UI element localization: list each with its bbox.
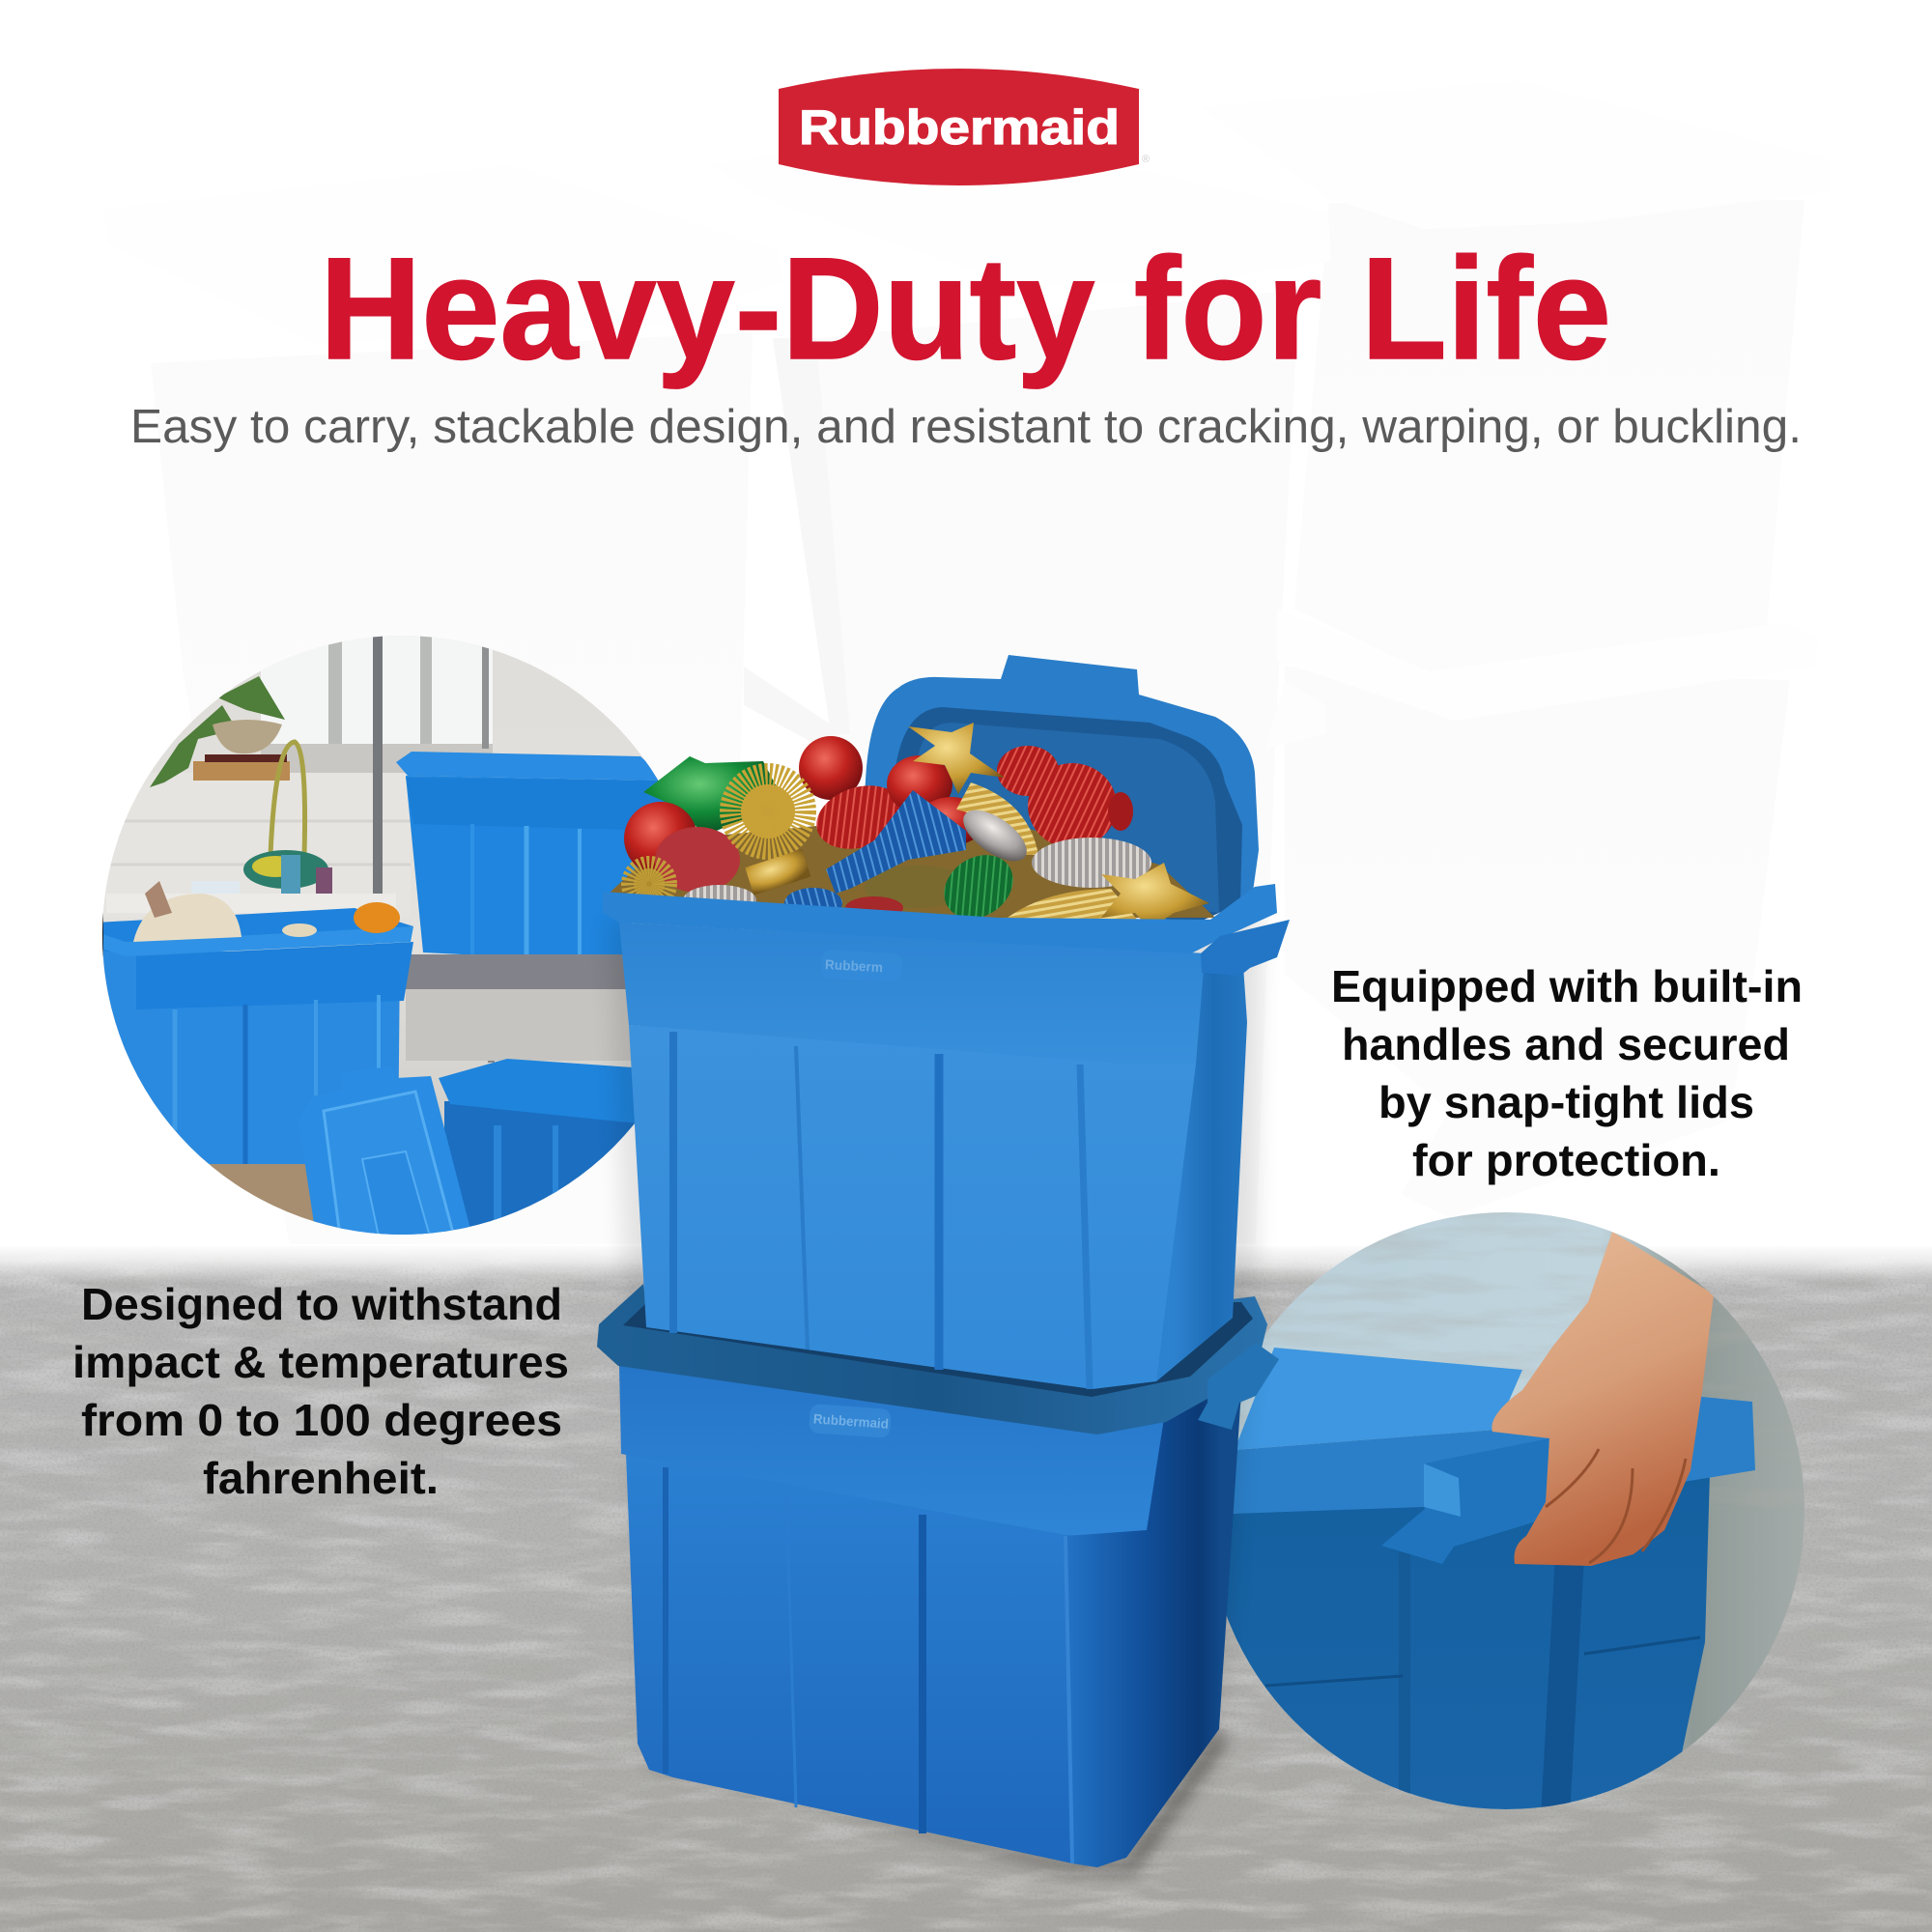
red ball, left xyxy=(624,802,697,875)
striped red ornament, centre xyxy=(809,775,911,860)
stone texture xyxy=(1240,1212,1607,1422)
gold tinsel, centre xyxy=(741,784,795,838)
gold star tail xyxy=(956,782,1038,855)
soft shadow of bin stack xyxy=(609,918,1261,1860)
subtitle: Easy to carry, stackable design, and resistant to cracking, warping, or buckling. xyxy=(130,401,1802,453)
red cluster behind star xyxy=(887,755,952,813)
top bin logo mark xyxy=(820,950,903,982)
bottom bin ribs xyxy=(666,1467,1072,1863)
silver ribbed ornament xyxy=(1032,838,1151,888)
blue tree ornament xyxy=(826,790,966,894)
bottom bin side xyxy=(1065,1362,1246,1867)
logo: Rubbermaid: Rubbermaid xyxy=(799,100,1120,155)
red ornament, low xyxy=(845,896,903,920)
white brick ledge xyxy=(110,773,411,866)
gold star tail, low xyxy=(1001,889,1140,923)
floor shadow under bins xyxy=(638,1729,1227,1874)
front blue bin xyxy=(97,908,413,1164)
top bin rim xyxy=(603,884,1277,953)
top bin upper band xyxy=(619,923,1208,1064)
callout: temperature text: fahrenheit. xyxy=(203,1453,439,1503)
bottom bin logo mark xyxy=(809,1404,892,1438)
bottom bin rim inner recess xyxy=(623,1302,1253,1397)
wire shelving poles xyxy=(373,628,495,1063)
panel: lifestyle photo circle, left xyxy=(102,636,667,1235)
callout: temperature text xyxy=(72,1279,569,1503)
gold shooting star xyxy=(908,723,1005,794)
silver ornament, low xyxy=(683,885,756,916)
lid inner panel xyxy=(869,707,1242,923)
gold box xyxy=(745,849,810,895)
logo: Rubbermaid xyxy=(779,69,1150,185)
background: ghosted white stacked bins xyxy=(104,81,1830,1246)
red tangled ornament xyxy=(655,827,740,893)
background: concrete floor xyxy=(0,1244,1932,1932)
lower right bin xyxy=(439,1059,647,1236)
callout: handles text: for protection. xyxy=(1412,1135,1720,1185)
bin lid top xyxy=(1235,1348,1522,1450)
logo: Rubbermaid: ® xyxy=(1142,154,1150,165)
striped red ornament, right xyxy=(1028,763,1117,848)
top bin logo mark: Rubberm xyxy=(825,956,883,975)
bin contents: toy and orange xyxy=(133,881,400,942)
contents backing xyxy=(609,811,1215,918)
bottom bin upper band xyxy=(619,1366,1179,1536)
callout: temperature text: Designed to withstand xyxy=(81,1279,562,1329)
left dark edge xyxy=(102,912,103,958)
top bin body xyxy=(629,1025,1233,1389)
green star ornament xyxy=(643,756,784,836)
gold star, low xyxy=(1101,863,1209,929)
carry handle xyxy=(1381,1438,1549,1564)
wood floor xyxy=(209,1164,319,1223)
product: top bin with lid and ornaments xyxy=(603,655,1290,1389)
bottom bin handle xyxy=(1198,1343,1279,1430)
hand xyxy=(1492,1232,1714,1566)
product: bottom bin xyxy=(597,1284,1279,1867)
top bin handle xyxy=(1201,920,1290,976)
ornaments xyxy=(609,723,1215,931)
blue ornament, low xyxy=(784,888,842,919)
window xyxy=(261,633,493,781)
bin lid front xyxy=(1233,1394,1755,1514)
silver ornament xyxy=(955,800,1035,871)
back blue bin on shelf xyxy=(396,752,667,962)
gold tinsel, left xyxy=(634,868,665,899)
panel: hand lifting bin photo circle, right xyxy=(1198,1208,1816,1816)
callout: temperature text: impact & temperatures xyxy=(72,1337,569,1387)
callout: handles text: handles and secured xyxy=(1342,1019,1790,1069)
wire shelf xyxy=(406,954,638,989)
bin body xyxy=(1198,1473,1710,1816)
bottom bin dark rim xyxy=(597,1284,1267,1435)
callout: handles text: by snap-tight lids xyxy=(1378,1077,1754,1127)
callout: temperature text: from 0 to 100 degrees xyxy=(81,1395,562,1445)
callout: handles text xyxy=(1331,961,1803,1185)
title: Heavy-Duty for Life xyxy=(320,227,1611,389)
plant, bowl and books xyxy=(150,676,290,787)
callout: handles text: Equipped with built-in xyxy=(1331,961,1803,1011)
top bin side xyxy=(1156,952,1247,1381)
green striped ornament xyxy=(932,842,1025,931)
red ornament under tail xyxy=(918,797,985,845)
bottom bin logo mark: Rubbermaid xyxy=(812,1410,889,1432)
lower wall xyxy=(406,989,638,1061)
basket and bottles xyxy=(191,739,383,902)
bottom bin body xyxy=(626,1454,1147,1867)
mixed tinsel at centre xyxy=(865,866,971,908)
leaning lid xyxy=(298,1066,472,1236)
open lid xyxy=(860,655,1259,918)
top bin ribs xyxy=(673,1032,1090,1389)
red ball, top xyxy=(799,736,863,800)
